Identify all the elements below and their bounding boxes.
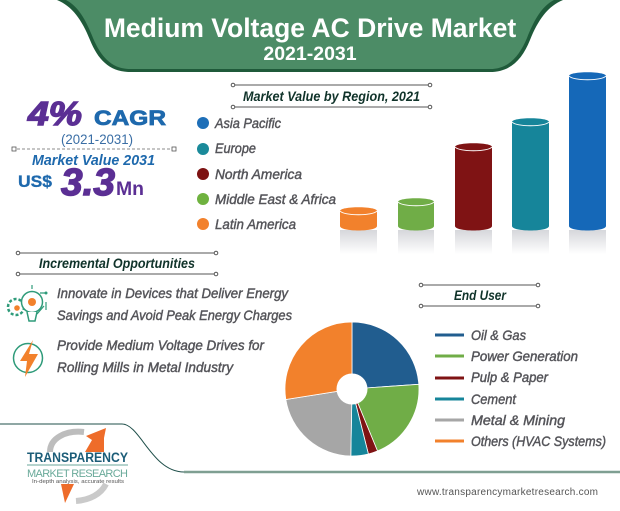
end user legend: Metal & Mining <box>471 412 565 428</box>
icon: gear and light bulb <box>8 285 48 321</box>
opportunity text 2 <box>57 337 265 375</box>
region legend: Asia Pacific <box>214 115 281 131</box>
logo: Transparency Market Research: MARKET RESEARCH <box>27 468 128 480</box>
CAGR callout: 4% <box>27 95 82 132</box>
CAGR callout: US$ <box>18 172 53 191</box>
region legend: Latin America <box>215 216 296 232</box>
opportunity text 1: Savings and Avoid Peak Energy Charges <box>57 307 292 323</box>
end user legend: Power Generation <box>471 348 578 364</box>
region legend: Europe <box>215 140 256 156</box>
heading: end user: End User <box>454 287 507 303</box>
heading: market value by region <box>231 83 432 109</box>
end user legend: Others (HVAC Systems) <box>471 433 606 449</box>
end user legend: Oil & Gas <box>471 327 526 343</box>
footer divider curve <box>0 424 620 472</box>
heading: incremental opportunities <box>16 251 218 276</box>
logo: Transparency Market Research <box>27 428 128 503</box>
CAGR callout: (2021-2031) <box>61 131 133 147</box>
end user legend: Cement <box>471 391 517 407</box>
CAGR callout: Market Value 2031 <box>32 152 155 169</box>
cylinder bar chart <box>340 72 606 254</box>
title banner: Medium Voltage AC Drive Market <box>104 13 516 43</box>
CAGR callout: 3.3 <box>61 162 115 204</box>
opportunity text 2: Rolling Mills in Metal Industry <box>57 359 234 375</box>
end user legend: Pulp & Paper <box>471 369 549 385</box>
title banner <box>57 0 563 72</box>
region legend: Middle East & Africa <box>215 191 336 207</box>
end user legend <box>435 327 606 449</box>
logo: Transparency Market Research: TRANSPARENCY <box>27 450 128 465</box>
heading: incremental opportunities: Incremental Opportunities <box>39 255 195 271</box>
region legend: North America <box>215 166 302 182</box>
logo: Transparency Market Research: In-depth analysis, accurate results <box>32 479 124 485</box>
opportunity text 1: Innovate in Devices that Deliver Energy <box>57 285 289 301</box>
website url: www.transparencymarketresearch.com <box>416 487 598 498</box>
CAGR callout: CAGR <box>94 107 166 130</box>
opportunity text 1 <box>57 285 292 323</box>
region legend <box>197 115 336 232</box>
icon: lightning bolt <box>14 340 42 377</box>
donut chart: end user <box>285 322 419 456</box>
CAGR callout: Mn <box>116 179 144 200</box>
opportunity text 2: Provide Medium Voltage Drives for <box>57 337 265 353</box>
title banner: 2021-2031 <box>263 43 357 65</box>
heading: market value by region: Market Value by Region, 2021 <box>243 88 420 104</box>
heading: end user <box>419 283 540 308</box>
CAGR callout <box>12 95 176 204</box>
